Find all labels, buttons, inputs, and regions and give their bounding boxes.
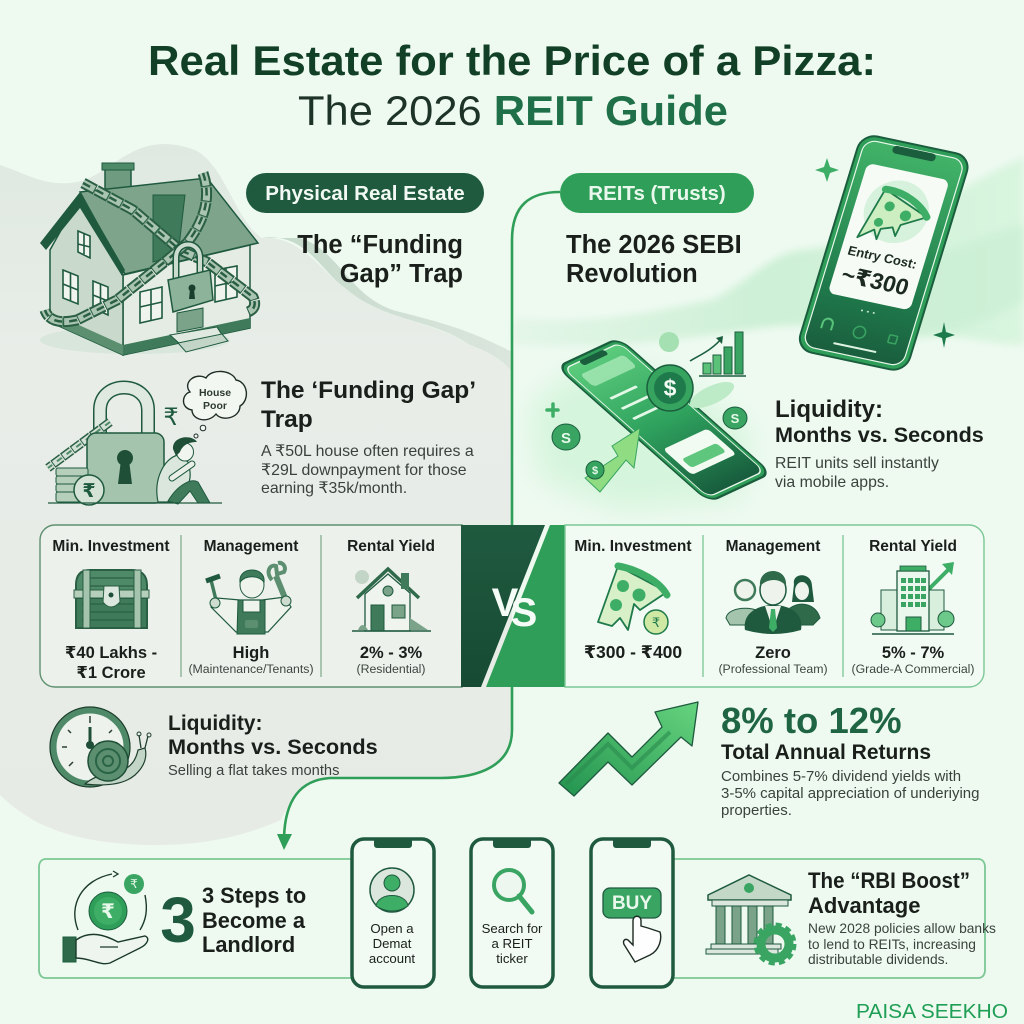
icon: hand with rupee coin: ₹ (101, 901, 115, 923)
icon: bar chart (690, 332, 746, 376)
heading: funding gap trap (297, 231, 463, 288)
column: rental yield: 2% - 3% (360, 644, 423, 662)
column: rental yield: (Grade-A Commercial) (852, 662, 974, 676)
connector line with arrow (277, 192, 560, 850)
stat: total annual returns: 3-5% capital appreciation of underiying (721, 785, 980, 802)
text: funding gap trap: A ₹50L house often requires a (261, 443, 474, 460)
stat: total annual returns: Total Annual Returns (721, 741, 931, 764)
heading: SEBI revolution (566, 231, 742, 288)
text: RBI boost: to lend to REITs, increasing (808, 937, 976, 952)
column: management: (Professional Team) (718, 662, 828, 676)
icon: padlock on house (168, 244, 213, 312)
text: liquidity physical: Selling a flat takes months (168, 763, 339, 779)
background: left grey wave panel (0, 144, 512, 845)
step 1: phone open demat: Demat (373, 936, 412, 951)
column: min investment (574, 538, 692, 662)
heading: 3 steps: Become a (202, 908, 306, 933)
step 1: phone open demat: account (369, 951, 415, 966)
thought cloud: house poor: House (199, 387, 231, 399)
text: RBI boost: distributable dividends. (808, 952, 948, 967)
pill: physical real estate: Physical Real Estate (265, 182, 465, 205)
heading: SEBI revolution: The 2026 SEBI (566, 231, 742, 259)
pill: physical real estate (246, 173, 484, 213)
step 2: phone search ticker: ticker (496, 951, 528, 966)
panel: steps strip (39, 838, 996, 987)
thought cloud: house poor: Poor (203, 400, 227, 412)
icon: treasure chest (74, 570, 149, 628)
panel: VS divider: S (511, 591, 537, 635)
icon: chain and padlock (48, 388, 164, 503)
icon: phone body (557, 338, 771, 502)
title: The 2026 REIT Guide (298, 87, 728, 134)
text: liquidity REIT: Months vs. Seconds (775, 422, 984, 447)
pill: REITs: REITs (Trusts) (588, 182, 726, 205)
icon: plus sparkles (547, 404, 558, 416)
heading: SEBI revolution: Revolution (566, 260, 698, 288)
text: RBI boost (808, 868, 996, 967)
column: min investment: ₹40 Lakhs - (65, 644, 157, 662)
step 3: phone buy button (591, 838, 673, 987)
column: management: Zero (755, 644, 791, 662)
icon: small coins: $ (592, 465, 598, 477)
heading: 3 steps: Landlord (202, 932, 295, 957)
stat: total annual returns: Combines 5-7% dividend yields with (721, 768, 961, 785)
pill: REITs (560, 173, 754, 213)
icon: phone with pizza entry cost (796, 133, 971, 373)
text: funding gap trap: The ‘Funding Gap’ (261, 377, 476, 404)
heading: 3 steps: 3 Steps to (202, 883, 306, 908)
text: funding gap trap (261, 377, 476, 497)
column: rental yield: (Residential) (356, 662, 426, 676)
icon: small coins: S (561, 430, 571, 447)
column: management (718, 538, 828, 676)
icon: worried person (48, 437, 222, 504)
icon: chained house (40, 163, 258, 355)
icon: small coins: S (731, 411, 740, 426)
icon: small house (352, 569, 431, 631)
column: management: High (233, 644, 269, 662)
column: rental yield (347, 538, 435, 676)
column: management (188, 538, 314, 676)
text: liquidity REIT: Liquidity: (775, 396, 883, 423)
step 1: phone open demat (352, 838, 434, 987)
column: rental yield: Rental Yield (869, 538, 957, 555)
column: min investment: Min. Investment (574, 538, 692, 555)
icon: pizza and rupee coin: ₹ (652, 615, 660, 630)
icon: dollar coin: $ (664, 375, 677, 401)
text: funding gap trap: ₹29L downpayment for those (261, 462, 467, 479)
panel: physical comparison (40, 525, 462, 687)
icon: coin stack: ₹ (82, 481, 96, 502)
column: rental yield: 5% - 7% (882, 644, 945, 662)
column: management: (Maintenance/Tenants) (188, 662, 314, 676)
background: right green wave (512, 157, 1024, 510)
column: min investment: ₹1 Crore (76, 664, 146, 682)
icon: hand with rupee coin: ₹ (130, 877, 138, 891)
text: liquidity physical (168, 712, 378, 779)
thought cloud: house poor (184, 371, 246, 438)
text: funding gap trap: Trap (261, 406, 313, 433)
text: RBI boost: Advantage (808, 893, 920, 918)
heading: funding gap trap: Gap” Trap (340, 260, 463, 288)
panel: VS divider (461, 525, 566, 687)
stat: total annual returns: properties. (721, 802, 792, 819)
text: liquidity REIT: via mobile apps. (775, 474, 889, 491)
icon: bank with gear (706, 875, 794, 963)
icon: rupee symbol: ₹ (163, 404, 179, 431)
icon: phone with pizza entry cost: ~₹300 (838, 261, 912, 300)
icon: chain on house (45, 173, 255, 322)
icon: sparkles (815, 158, 955, 348)
panel: REIT comparison (565, 525, 984, 687)
column: min investment: ₹300 - ₹400 (584, 642, 682, 662)
panel: VS divider: V (492, 581, 519, 625)
title (148, 37, 876, 134)
icon: growth arrow (559, 702, 698, 796)
text: RBI boost: The “RBI Boost” (808, 868, 970, 893)
icon: clock and snail (50, 707, 151, 787)
column: management: Management (204, 538, 298, 555)
icon: growth arrow on phone (585, 428, 640, 492)
icon: coin stack (56, 468, 104, 505)
icon: small coins (552, 332, 747, 479)
step 2: phone search ticker: a REIT (491, 936, 533, 951)
step 1: phone open demat: Open a (370, 921, 414, 936)
icon: padlock and worried person (48, 371, 246, 505)
column: min investment (52, 538, 170, 682)
heading: 3 steps: 3 (160, 884, 196, 956)
heading: 3 steps (160, 883, 306, 957)
text: RBI boost: New 2028 policies allow banks (808, 921, 996, 936)
text: funding gap trap: earning ₹35k/month. (261, 480, 407, 497)
icon: pizza slice (857, 186, 932, 250)
text: liquidity REIT: REIT units sell instantly (775, 455, 939, 472)
column: min investment: Min. Investment (52, 538, 170, 555)
column: rental yield (852, 538, 974, 676)
column: rental yield: Rental Yield (347, 538, 435, 555)
icon: trading phone with coins (547, 332, 771, 502)
stat: total annual returns (721, 700, 980, 819)
stat: total annual returns: 8% to 12% (721, 700, 902, 741)
icon: office building with arrow (871, 562, 954, 634)
step 3: phone buy button: BUY (612, 893, 652, 914)
heading: funding gap trap: The “Funding (297, 231, 463, 259)
brand logo: PAISA SEEKHO (856, 1001, 1008, 1023)
column: management: Management (726, 538, 820, 555)
text: liquidity physical: Months vs. Seconds (168, 734, 378, 759)
icon: phone with pizza entry cost: Entry Cost: (846, 243, 919, 272)
step 2: phone search ticker (471, 838, 553, 987)
step 2: phone search ticker: Search for (482, 921, 543, 936)
icon: dollar coin (647, 365, 693, 411)
title: Real Estate for the Price of a Pizza: (148, 37, 876, 84)
icon: handyman (206, 563, 291, 634)
text: liquidity physical: Liquidity: (168, 712, 262, 735)
icon: professional team (726, 571, 820, 634)
icon: hand with rupee coin (63, 871, 148, 964)
text: liquidity REIT (775, 396, 984, 491)
